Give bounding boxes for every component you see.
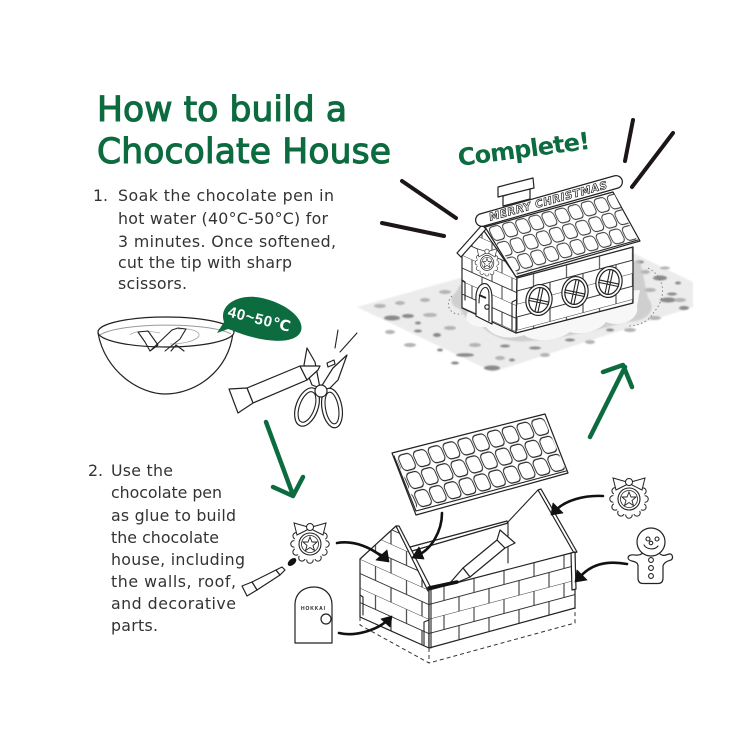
round windows: [523, 264, 625, 318]
step 1 text: hot water (40°C-50°C) for: [118, 209, 328, 228]
title: [97, 90, 391, 172]
front left wall: [360, 526, 431, 648]
chocolate glue line: [429, 582, 457, 588]
celebration rays: [382, 120, 673, 236]
step 2 text: parts.: [111, 616, 158, 635]
small glue pen: [242, 556, 298, 596]
wreath left: [294, 523, 326, 560]
complete heading: Complete!: [456, 127, 592, 172]
step 2 text: Use the: [111, 461, 173, 480]
chimney: [498, 178, 534, 206]
step 1 text: scissors.: [118, 274, 187, 293]
roof: [485, 192, 640, 277]
step 1 text: [93, 186, 336, 293]
left wall: [462, 228, 517, 333]
gable trim: [457, 225, 486, 257]
far gable edge: [538, 489, 577, 553]
wreath: [477, 249, 497, 274]
step 2 text: chocolate pen: [111, 483, 222, 502]
arrow down to step 2: [266, 422, 303, 496]
door piece: HOKKAI: [301, 606, 326, 612]
door: [476, 284, 492, 324]
step 1 text: Soak the chocolate pen in: [118, 186, 334, 205]
step 2 text: the walls, roof,: [111, 572, 236, 591]
door piece: [295, 587, 332, 643]
snowman cookie: [628, 528, 672, 584]
title: Chocolate House: [97, 132, 391, 172]
step 2 text: as glue to build: [111, 506, 236, 525]
step 1 text: cut the tip with sharp: [118, 253, 292, 272]
step 2 text: [88, 461, 245, 635]
back wall and ridge: [410, 490, 538, 563]
temperature bubble: 40~50℃: [226, 304, 292, 336]
step 2 text: the chocolate: [111, 528, 219, 547]
curved assembly arrows: [337, 496, 627, 634]
chocolate pen: [229, 366, 320, 413]
decorated mat: [357, 253, 693, 372]
title: How to build a: [97, 90, 347, 130]
step 1 text: 1.: [93, 186, 108, 205]
front right wall: [429, 552, 576, 648]
wreath right: [613, 478, 645, 515]
house walls under construction: [360, 489, 577, 663]
step 1 text: 3 minutes. Once softened,: [118, 232, 336, 251]
step 2 text: 2.: [88, 461, 103, 480]
cut tip and snip lines: [327, 330, 357, 367]
merry christmas band: MERRY CHRISTMAS: [488, 180, 609, 224]
bowl of hot water: [98, 317, 234, 394]
pens in water: [138, 328, 186, 351]
scissors cutting pen: [229, 330, 357, 430]
doily: [448, 260, 663, 341]
right wall: [516, 247, 633, 333]
glue pen on wall: [450, 530, 515, 583]
scissors: [290, 348, 347, 430]
dashed base: [360, 608, 575, 663]
arrow up to finished house: [590, 365, 632, 437]
step 2 text: and decorative: [111, 594, 236, 613]
step 2 text: house, including: [111, 550, 245, 569]
roof panel: [392, 414, 568, 515]
finished chocolate house: [457, 178, 640, 333]
temperature bubble: [217, 297, 302, 341]
